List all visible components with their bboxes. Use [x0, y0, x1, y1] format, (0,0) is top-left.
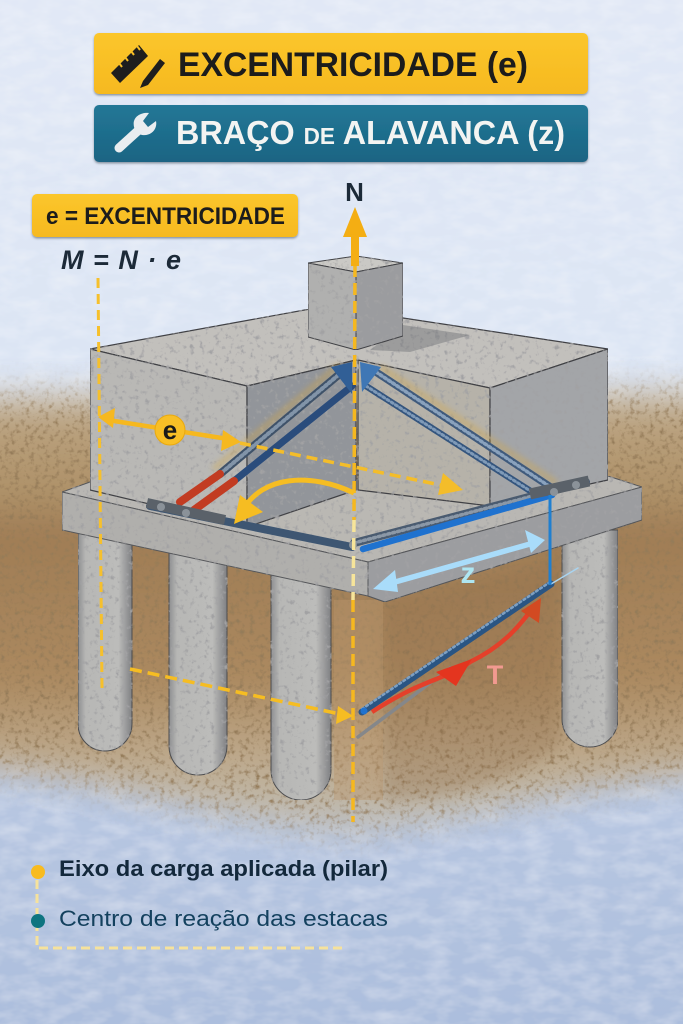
icon: wrench — [119, 113, 156, 148]
legend connector — [37, 880, 342, 948]
e badge — [155, 415, 185, 445]
piles — [78, 525, 618, 800]
left block side face — [247, 360, 356, 527]
left reference dashed line — [98, 278, 102, 688]
double arrow — [98, 408, 241, 451]
z dimension — [373, 495, 550, 592]
z arrow — [373, 530, 545, 592]
heading text: EXCENTRICIDADE (e) — [178, 46, 528, 84]
pile 3 — [271, 560, 331, 800]
compression nodes — [331, 362, 381, 394]
bar anchor plates — [147, 481, 589, 549]
left block top — [90, 309, 608, 388]
right block inner face — [358, 360, 490, 506]
banner: excentricidade — [94, 33, 588, 94]
right strut bars — [366, 372, 552, 492]
banner: braço de alavanca — [94, 105, 588, 162]
icon: ruler and pencil — [111, 45, 165, 88]
e badge: e — [163, 415, 177, 445]
pile 2 — [169, 540, 227, 775]
dashed line to reaction centre — [130, 669, 368, 724]
label z: z — [460, 557, 476, 590]
left block front face — [90, 349, 247, 527]
excavation shading — [334, 560, 560, 800]
lower inclined bar — [362, 584, 551, 712]
legend item: load axis: Eixo da carga aplicada (pilar) — [59, 856, 388, 881]
reinforcement bars — [147, 366, 589, 737]
column shadow — [370, 325, 470, 352]
formula: M = N · e — [61, 245, 181, 275]
notch floor — [247, 490, 490, 548]
grey lower bar — [358, 668, 450, 737]
left tie bar — [150, 506, 352, 547]
right tie bar — [354, 482, 586, 543]
pile cap base slab — [62, 476, 642, 602]
arrowhead — [438, 473, 463, 495]
blue tie highlight — [363, 495, 552, 549]
legend item: reaction centre: Centro de reação das estacas — [59, 906, 388, 931]
foundation blocks — [90, 309, 608, 548]
eccentricity dimension — [98, 408, 463, 495]
label N: N — [345, 177, 364, 207]
right block outer face — [490, 349, 608, 506]
soil mass — [0, 392, 683, 832]
legend — [31, 856, 388, 948]
left strut bars — [180, 372, 352, 510]
faint projection line — [551, 568, 578, 584]
pile 4 — [562, 530, 618, 747]
pillar — [308, 256, 403, 350]
load axis line — [353, 265, 355, 822]
blue vertical line — [548, 495, 552, 585]
tag: e = excentricidade — [32, 194, 298, 237]
label T: T — [487, 660, 504, 690]
heading text: BRAÇO DE ALAVANCA (z) — [176, 114, 565, 151]
tension arrow — [372, 598, 541, 712]
tag: e = excentricidade: e = EXCENTRICIDADE — [46, 203, 285, 230]
pile 1 — [78, 525, 132, 751]
dashed projection — [240, 443, 445, 486]
N arrow — [343, 207, 367, 266]
curved moment arrow — [234, 480, 354, 524]
strut glow — [215, 366, 555, 482]
